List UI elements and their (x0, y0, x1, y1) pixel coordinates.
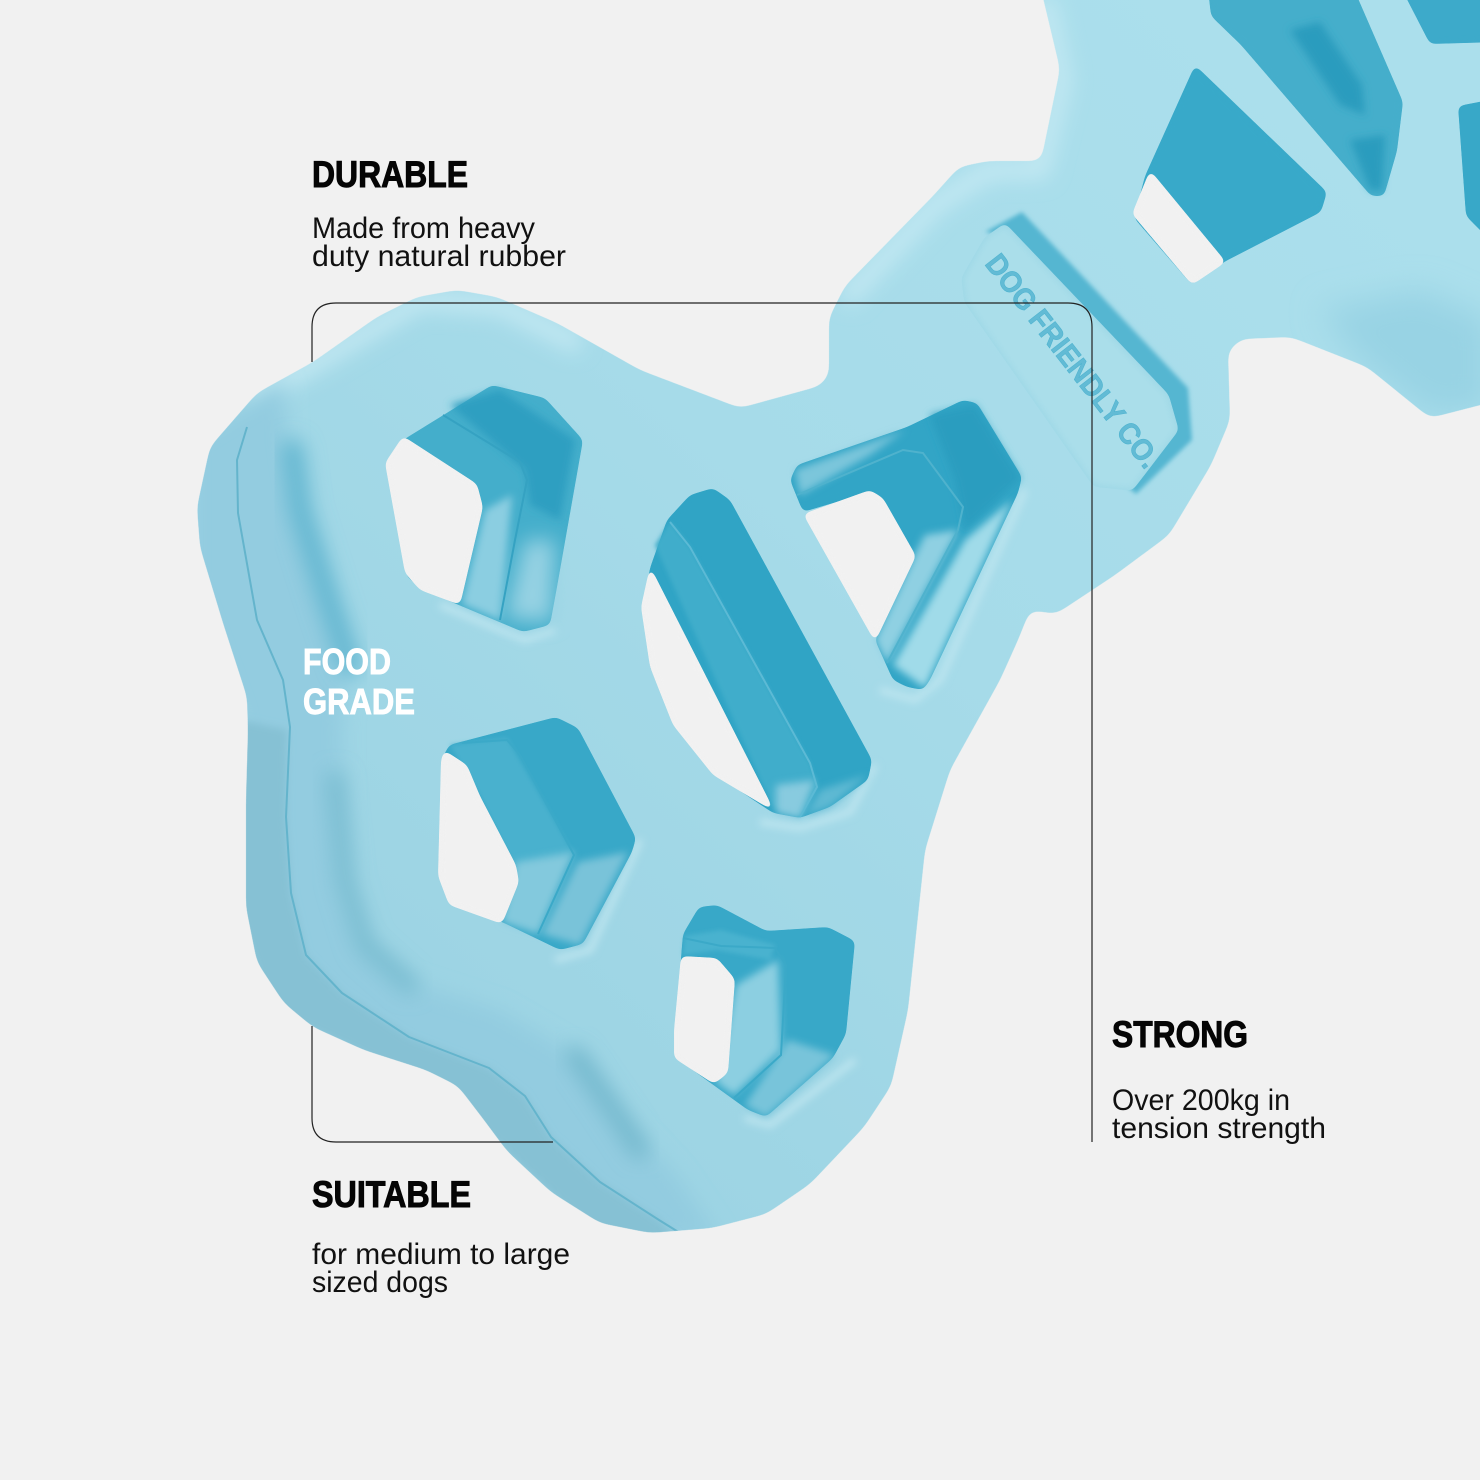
hole: centre (641, 488, 872, 818)
hole: upper bone window (1132, 65, 1327, 285)
callout: durable: DURABLE (312, 154, 468, 195)
callout bracket lines (312, 303, 1092, 1142)
plate recess with brand name (962, 212, 1192, 494)
callout: durable: duty natural rubber (312, 240, 566, 273)
highlights on toy rim (250, 0, 1062, 400)
brand text: DOG FRIENDLY CO. (978, 248, 1166, 475)
callout: food grade (303, 641, 415, 722)
upper right lobe shade (1320, 290, 1480, 415)
callout: suitable (312, 1174, 570, 1299)
callout: food grade: FOOD (303, 641, 391, 682)
hole: bottom (674, 905, 855, 1117)
left face shadow (292, 450, 350, 665)
hole: lower left (438, 717, 636, 950)
callout: durable: Made from heavy (312, 212, 535, 245)
mould seam line (237, 427, 680, 1233)
callout: strong (1112, 1014, 1326, 1145)
hole rim highlights (440, 490, 1025, 1125)
hole: upper left (385, 385, 583, 632)
hole: upper right (790, 400, 1022, 690)
side wall shading (190, 380, 720, 1240)
infographic canvas (197, 0, 1480, 1298)
callout: durable (312, 154, 566, 273)
outer wall below seam (235, 720, 680, 1240)
callout: food grade: GRADE (303, 681, 415, 722)
bone toy (150, 0, 1480, 1280)
callout: suitable: for medium to large (312, 1238, 570, 1271)
callout: strong: tension strength (1112, 1112, 1326, 1145)
callout: suitable: SUITABLE (312, 1174, 471, 1215)
holes: top edge of upper bone (1207, 0, 1480, 250)
callout: strong: Over 200kg in (1112, 1084, 1290, 1117)
callout: suitable: sized dogs (312, 1266, 448, 1299)
callout: strong: STRONG (1112, 1014, 1248, 1055)
